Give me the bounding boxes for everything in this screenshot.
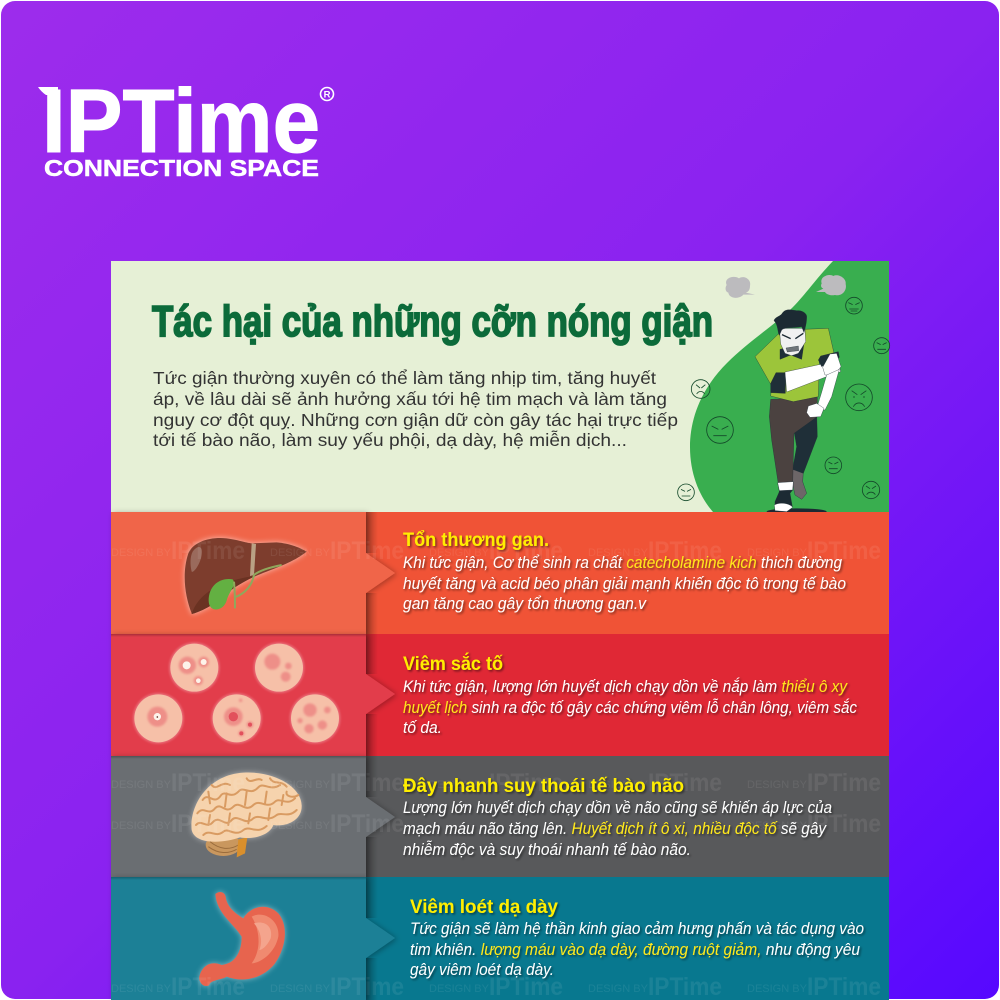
watermark row 3: DESIGN BY: [111, 820, 172, 832]
logo: IPTime: IPTime: [42, 72, 320, 172]
watermark row 4: DESIGN BY: [588, 983, 649, 995]
text: brain: mạch máu não tăng lên. Huyết dịch ít ô xi, nhiều độc tố sẽ gây: [403, 820, 827, 838]
logo: tagline: CONNECTION SPACE: [44, 155, 319, 181]
left block with arrow: [111, 634, 395, 756]
watermark row 1: IPTime: [489, 537, 563, 565]
watermark row 3: DESIGN BY: [588, 779, 649, 791]
left block with arrow: [111, 756, 395, 877]
watermark row 1: DESIGN BY: [111, 547, 172, 559]
watermark row 1: IPTime: [330, 537, 404, 565]
text: skin: tố da.: [403, 719, 442, 737]
text: brain: nhiễm độc và suy thoái nhanh tế bào não.: [403, 840, 691, 859]
icon: stomach: [199, 892, 285, 986]
angry faces: [678, 297, 890, 501]
icon: liver: [185, 538, 307, 614]
logo: registered mark: [320, 88, 334, 101]
text: liver: Tổn thương gan.: [403, 530, 549, 551]
watermark row 3: DESIGN BY: [429, 779, 490, 791]
illustration: angry man and faces: [678, 275, 890, 515]
text: liver: [403, 530, 846, 613]
text: brain: Lượng lớn huyết dịch chạy dồn về não cũng sẽ khiến áp lực của: [403, 799, 832, 817]
panel: row 2 skin: [111, 634, 889, 756]
intro paragraph: Tức giận thường xuyên có thể làm tăng nhịp tim, tăng huyết: [153, 368, 656, 388]
icon: skin pores: [133, 642, 340, 744]
watermark row 3: DESIGN BY: [270, 779, 331, 791]
panel: header: [111, 261, 890, 515]
watermark row 4: [111, 973, 881, 1000]
watermark row 4: DESIGN BY: [111, 983, 172, 995]
watermark row 1: IPTime: [807, 537, 881, 565]
watermark row 3: IPTime: [807, 810, 881, 838]
smoke clouds: [726, 275, 846, 298]
text: stomach: Viêm loét dạ dày: [410, 897, 558, 918]
watermark row 3: IPTime: [171, 810, 245, 838]
watermark row 3: IPTime: [330, 769, 404, 797]
text: stomach: [410, 897, 864, 979]
watermark row 1: [111, 537, 881, 565]
watermark row 3: IPTime: [648, 769, 722, 797]
green blob: [690, 261, 889, 512]
watermark row 3: DESIGN BY: [747, 820, 808, 832]
watermark row 4: DESIGN BY: [747, 983, 808, 995]
watermark row 3: DESIGN BY: [270, 820, 331, 832]
text: skin: [403, 653, 857, 737]
man: [755, 310, 841, 515]
watermark row 3: DESIGN BY: [111, 779, 172, 791]
watermark row 3: [111, 769, 881, 838]
text: liver: gan tăng cao gây tổn thương gan.v: [403, 595, 647, 613]
logo: registered mark: R: [324, 90, 331, 101]
watermark row 3: IPTime: [489, 769, 563, 797]
text: skin: Khi tức giận, lượng lớn huyết dịch chạy dồn về nắp làm thiểu ô xy: [403, 677, 848, 696]
watermark row 1: IPTime: [171, 537, 245, 565]
watermark row 1: DESIGN BY: [429, 547, 490, 559]
text: stomach: gây viêm loét dạ dày.: [410, 961, 554, 979]
intro paragraph: nguy cơ đột quỵ. Những cơn giận dữ còn gây tác hại trực tiếp: [153, 410, 678, 430]
watermark row 4: DESIGN BY: [270, 983, 331, 995]
text: brain: Đây nhanh suy thoái tế bào não: [403, 776, 684, 797]
title: Tác hại của những cỡn nóng giận: [152, 297, 713, 346]
watermark row 1: DESIGN BY: [270, 547, 331, 559]
watermark row 3: IPTime: [330, 810, 404, 838]
text: stomach: tim khiên. lượng máu vào dạ dày, đường ruột giảm, nhu động yêu: [410, 941, 860, 959]
watermark row 3: DESIGN BY: [747, 779, 808, 791]
watermark row 1: DESIGN BY: [747, 547, 808, 559]
text: skin: Viêm sắc tố: [403, 653, 503, 675]
left block with arrow: [111, 512, 395, 634]
panel: row 4 stomach: [111, 877, 889, 1000]
watermark row 1: IPTime: [648, 537, 722, 565]
icon: brain: [191, 772, 302, 857]
text: liver: Khi tức giận, Cơ thể sinh ra chất catecholamine kich thich đường: [403, 554, 842, 572]
left block with arrow: [111, 877, 395, 1000]
watermark row 3: IPTime: [171, 769, 245, 797]
watermark row 1: DESIGN BY: [588, 547, 649, 559]
intro paragraph: áp, về lâu dài sẽ ảnh hưởng xấu tới hệ tim mạch và làm tăng: [153, 389, 667, 409]
shadow strips beside left blocks: [111, 512, 378, 1000]
watermark row 4: DESIGN BY: [429, 983, 490, 995]
watermark row 3: IPTime: [807, 769, 881, 797]
intro paragraph: tới tế bào não, làm suy yếu phội, dạ dày, hệ miễn dịch...: [153, 429, 627, 450]
panel: row 3 brain: [111, 756, 889, 877]
intro paragraph: [153, 368, 678, 450]
text: brain: [403, 776, 832, 859]
text: skin: huyết lịch sinh ra độc tố gây các chứng viêm lỗ chân lông, viêm sắc: [403, 698, 857, 717]
text: liver: huyết tăng và acid béo phân giải mạnh khiến độc tô trong tế bào: [403, 575, 846, 593]
panel: row 1 liver: [111, 512, 889, 634]
text: stomach: Tức giận sẽ làm hệ thần kinh giao cảm hưng phấn và tác dụng vào: [410, 920, 864, 938]
